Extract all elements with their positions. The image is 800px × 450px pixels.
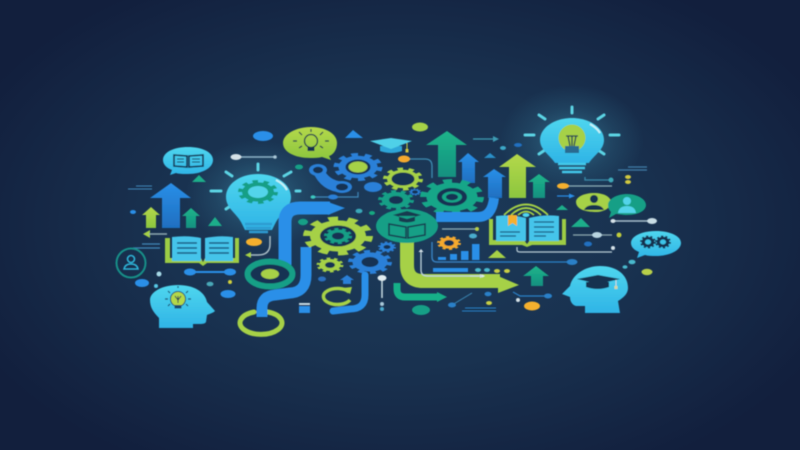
gear: small lime (318, 258, 342, 272)
arrow: teal up, right side (523, 266, 549, 286)
orange gear (439, 237, 459, 249)
small decorative dots and lines, upper left (128, 131, 277, 226)
arrow: large lime up (499, 154, 536, 198)
line and dots around chart (433, 227, 510, 273)
slider line and dots, center top (295, 164, 382, 225)
teal circle with book and cap (376, 209, 438, 243)
bulb rays (525, 107, 619, 154)
bulb gear (241, 182, 275, 202)
gear: small blue (410, 189, 420, 195)
right open book (489, 213, 566, 247)
lines and dots right of arrows (556, 167, 647, 210)
wifi arcs (504, 204, 548, 215)
small lower center items (299, 275, 354, 313)
lime open ring (240, 312, 282, 334)
triangles and sliders right of book (470, 218, 657, 278)
arrow: large blue up (150, 183, 191, 228)
bottom center dot and lines (412, 292, 496, 315)
gear: teal small (380, 191, 412, 209)
arrow: blue up behind (458, 153, 479, 183)
left bulb with gear (211, 164, 300, 232)
gear: medium blue (351, 252, 389, 272)
orange dot connector (398, 156, 432, 178)
gear: large lime with teal inner gear (308, 219, 368, 253)
teal ring target (248, 262, 292, 286)
bulb base (558, 164, 586, 172)
book in circle (389, 224, 425, 238)
glow: right bulb (500, 85, 644, 195)
small teal pipe arrow (397, 283, 447, 302)
gear: tiny blue (379, 242, 395, 252)
bulb glass (226, 174, 291, 230)
gray double-headed arrow path (418, 249, 484, 278)
arrow: lime up (142, 207, 160, 228)
lime speech bubble with bulb (283, 127, 337, 160)
thin arrow and dots above arrows (473, 136, 522, 158)
cyan speech bubble with gears (631, 231, 681, 258)
blue curl with rings (309, 164, 352, 193)
arrow: teal up (182, 208, 200, 228)
blue pipe lower left (262, 247, 306, 317)
person badge (116, 248, 146, 278)
connector below teal arrow (513, 292, 552, 310)
arrow head: lime right (498, 276, 519, 293)
illustration network (116, 107, 681, 334)
lime filament circle (558, 124, 586, 152)
cap on book (393, 211, 421, 222)
bar chart with axis (432, 237, 490, 262)
teal speech bubble: person (608, 194, 646, 218)
speech bubble: book (163, 147, 213, 175)
blue pipe below large gear (436, 198, 494, 217)
dumbbell connector and dots (135, 268, 236, 298)
head with graduation cap (562, 266, 628, 313)
lime ellipse and blue triangle (345, 122, 428, 138)
left open book (165, 236, 239, 266)
thought dots (622, 260, 652, 275)
right bulb (525, 107, 619, 172)
small bulb (170, 292, 186, 306)
pin with dots (378, 275, 386, 311)
gear: large teal (424, 181, 480, 213)
glow: left bulb (186, 140, 330, 250)
lower blue pipe (333, 275, 365, 311)
arrow: blue up (483, 169, 506, 198)
arrow: small teal up (528, 174, 550, 198)
bulb rays (211, 164, 300, 209)
lime speech bubble: person (576, 193, 611, 212)
bulb glass (540, 118, 604, 163)
gear: lime ring (386, 169, 420, 189)
arrow: large teal up (426, 131, 467, 177)
connector with left arrow and orange dot (133, 236, 270, 258)
head with light bulb (150, 285, 215, 328)
arrow: small lime left (143, 230, 167, 238)
lime pipe to big arrow (407, 240, 500, 281)
blue pipe from ring to arrow (285, 208, 330, 265)
bookmark (508, 215, 517, 226)
arrow head: blue right (328, 202, 345, 215)
bulb base (245, 224, 272, 232)
graduation cap (370, 138, 412, 153)
cap (586, 282, 609, 289)
gear: blue with lime center (337, 155, 379, 179)
